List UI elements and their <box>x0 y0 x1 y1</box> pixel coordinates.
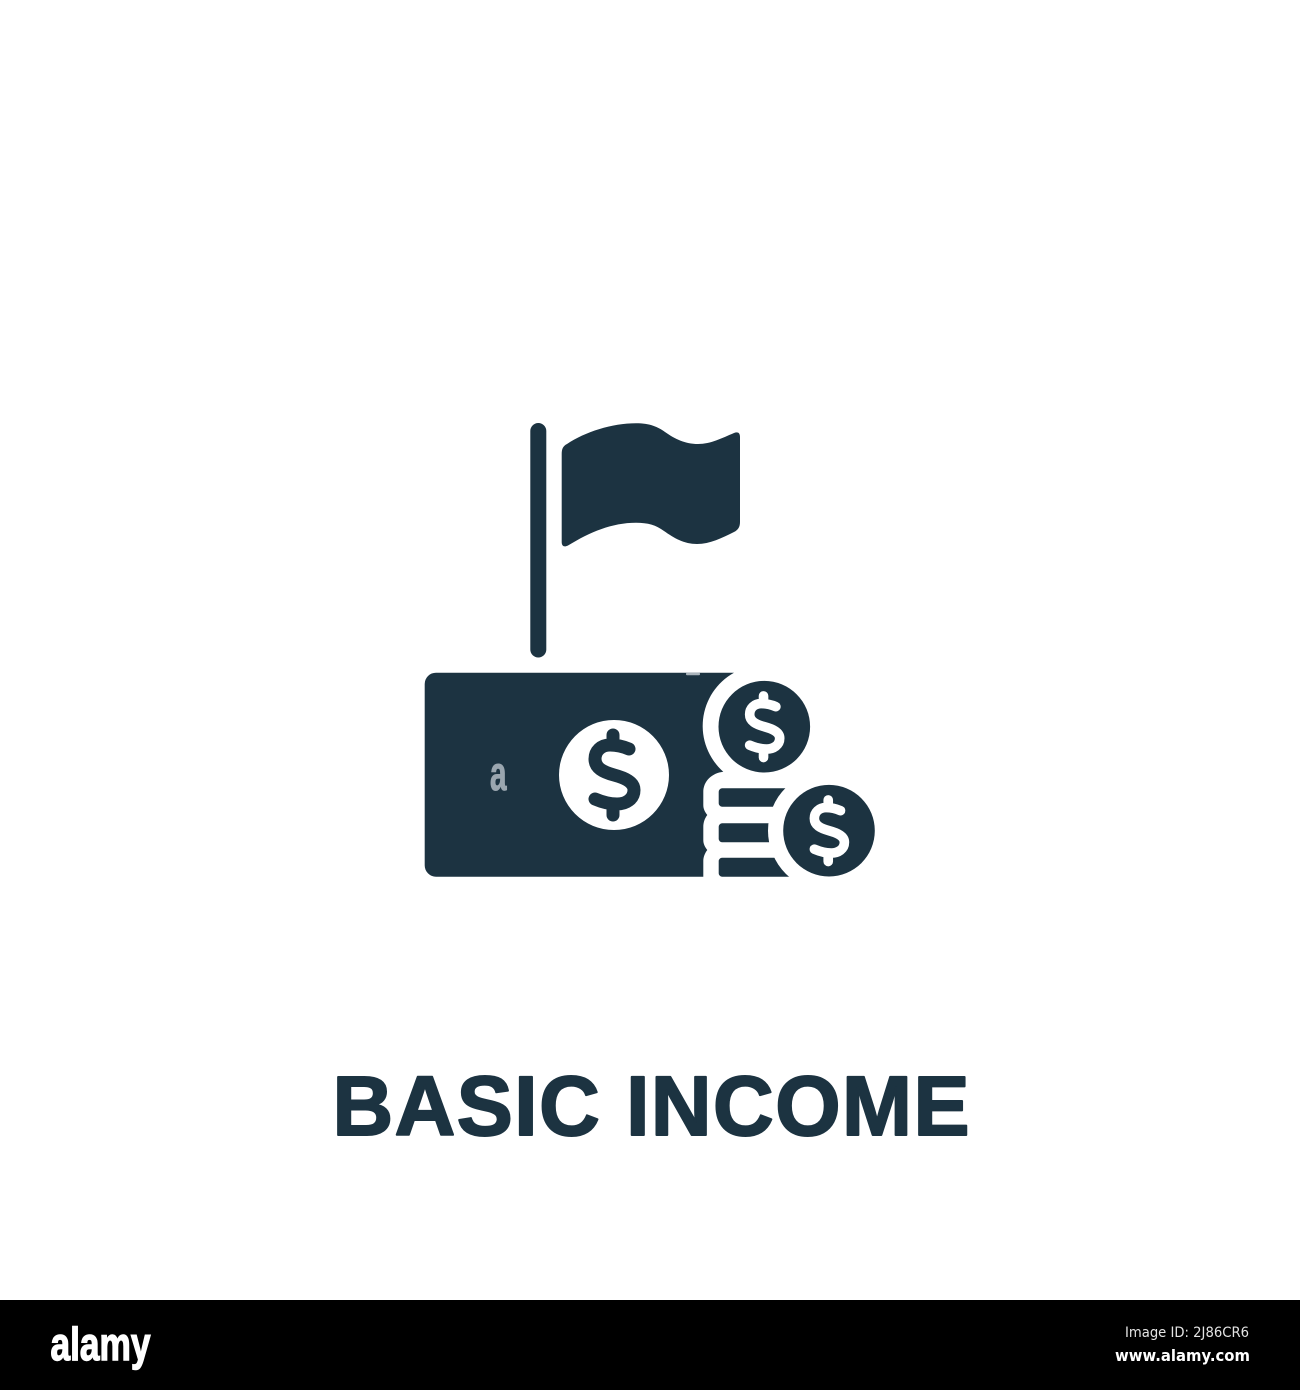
icon: banknote watermark letter: a <box>490 748 507 801</box>
icon: flag pole <box>530 423 546 658</box>
footer logo: alamy <box>50 1318 151 1370</box>
icon: banknote dollar medallion <box>559 720 669 830</box>
icon: lower dollar coin <box>768 770 890 892</box>
icon: banknote edge mark <box>686 673 700 675</box>
icon: waving flag <box>562 423 740 546</box>
icon: coin stack <box>719 788 800 877</box>
icon: basic income flag, banknote and coins <box>425 423 890 892</box>
footer website: www.alamy.com <box>1115 1346 1250 1365</box>
title: BASIC INCOME <box>332 1059 970 1153</box>
icon: upper dollar coin <box>718 681 810 772</box>
footer image id: Image ID: 2J86CR6 <box>1125 1325 1249 1341</box>
footer band <box>0 1300 1300 1390</box>
icon: banknote <box>425 673 734 877</box>
